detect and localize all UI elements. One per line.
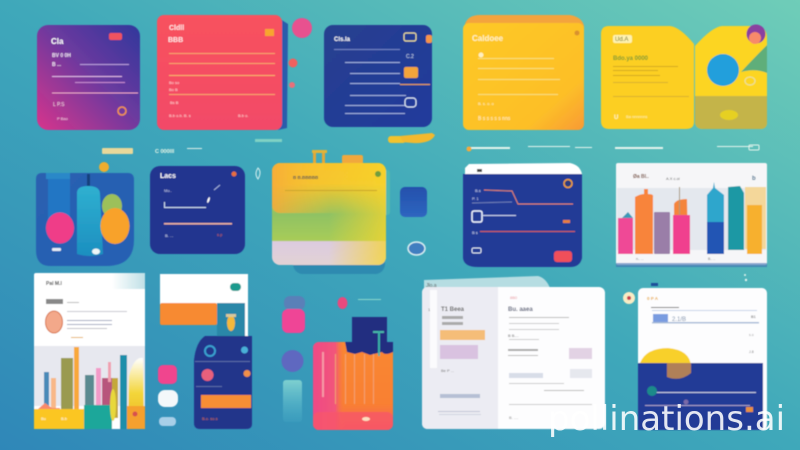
heading: navy list card: Cls.la	[334, 37, 351, 43]
panel: orange bag	[313, 317, 393, 430]
panel: red card: B.b o.	[238, 113, 248, 118]
panel: red card: Bo so	[169, 80, 180, 85]
panel: red card	[157, 15, 288, 130]
icon: red circle	[202, 369, 214, 381]
icon: small buttons column	[158, 365, 178, 426]
left column	[426, 283, 485, 415]
panel: white report with chart: Bu	[41, 416, 46, 421]
labels row between first and second row: C 000lll	[155, 149, 175, 155]
icon: orange tag	[404, 67, 418, 78]
panel: white bar chart: B.. ..	[708, 257, 715, 261]
panel: navy phone card	[194, 336, 252, 429]
panel: navy line card: Mo..	[164, 188, 172, 193]
icon: pill column	[282, 296, 381, 422]
panel: yellow folded card	[601, 26, 694, 129]
icon: orange ring	[564, 180, 572, 188]
panel: white and navy card	[638, 288, 767, 430]
button: teal pill	[230, 283, 241, 291]
panel: navy list card	[324, 25, 432, 127]
panel: purple card: BV 0 0H	[52, 53, 71, 59]
line chart	[484, 190, 573, 204]
panel: red card: Bo B	[169, 87, 178, 92]
icon: cream dot	[623, 292, 635, 304]
panel: yellow note card: B. s. o. o	[478, 101, 495, 106]
left column: 1	[428, 307, 431, 312]
panel: white and navy card: 0 P A	[647, 296, 659, 301]
panel: white and navy card: B1	[751, 314, 757, 319]
icon: peach ellipse	[46, 311, 62, 333]
heading: case: B B.BBBBB	[293, 175, 319, 180]
panel: purple card: L P.S	[53, 102, 65, 108]
footer: yellow	[34, 409, 84, 429]
labels row between first and second row	[102, 133, 759, 155]
panel: yellow note card: B s s s s s nns	[478, 116, 511, 122]
panel: red card: Bs B	[170, 100, 179, 105]
button: orange	[201, 395, 251, 408]
icon: tag top	[404, 33, 416, 41]
heading: navy line card: Lacs	[160, 173, 176, 180]
panel: white and navy card: s.o	[749, 333, 754, 337]
bars	[34, 347, 144, 429]
heading: yellow note card: Caldoee	[472, 34, 504, 43]
panel: white document	[422, 276, 605, 429]
panel: white report with chart: B.b	[61, 416, 68, 421]
heading: red card: Cldll	[169, 25, 184, 32]
icon: blue circle	[707, 54, 739, 86]
small sparkle marks	[256, 168, 747, 286]
panel: purple card: P Bao	[57, 116, 69, 121]
right column: 8B0	[510, 295, 518, 300]
yellow blob	[640, 348, 691, 380]
right column: B. ....	[509, 415, 518, 420]
panel: navy line card	[150, 166, 245, 254]
icon: blue rounded square	[400, 187, 427, 217]
panel: white report with chart	[34, 273, 145, 429]
panel: yellow gradient case	[272, 150, 390, 274]
icon: badge	[118, 107, 126, 115]
icon: dots beside red card	[288, 18, 312, 88]
panel: white and navy card: J.8	[749, 350, 754, 354]
panel: navy chart card with white header: P. 1	[472, 196, 479, 201]
heading: report: Pal M.l	[46, 281, 62, 287]
icon: pink ball	[46, 212, 74, 244]
icon: orange ball	[100, 208, 130, 244]
panel: blue bottles	[36, 162, 134, 266]
panel: navy line card: s.p	[217, 232, 223, 237]
icon: purple blob	[746, 24, 766, 44]
bars	[618, 182, 762, 254]
button: red	[554, 251, 572, 262]
heading: yellow folded card	[613, 35, 632, 43]
watermark: pollinations.ai	[548, 399, 785, 439]
panel: navy line card: B. ...	[165, 233, 173, 238]
icon: teal bottle	[77, 186, 103, 256]
panel: yellow folded card: U	[614, 115, 618, 121]
right column: B B....	[508, 333, 519, 338]
heading: purple card: Cla	[51, 37, 64, 46]
panel: navy list card: C.2	[406, 54, 414, 60]
panel: white and orange card	[160, 274, 248, 343]
right column	[508, 295, 592, 420]
panel: yellow shape card with blue circle	[695, 24, 767, 129]
panel: yellow note card	[463, 15, 584, 130]
panel: navy chart card with white header: B s	[472, 230, 478, 235]
icon: camera outline	[405, 98, 416, 107]
panel: white and navy card: 2.1/B	[672, 317, 686, 323]
right column: Bu. aaea	[508, 307, 533, 313]
left column: Jlo.a	[426, 283, 437, 289]
panel: white bar chart: b	[752, 176, 756, 182]
icon: small ring	[408, 242, 425, 255]
panel: white bar chart	[616, 163, 767, 267]
heading: bar chart: Øa Bl..	[633, 174, 649, 180]
panel: yellow folded card: Bdo.ya 0000	[613, 56, 649, 62]
slider lines	[655, 392, 756, 393]
panel: navy phone card: B.o. so.s	[202, 416, 218, 421]
panel: yellow folded card: Ba nnnnnns	[626, 114, 647, 119]
panel: purple card	[37, 25, 140, 130]
panel: purple card: B ...	[52, 62, 62, 68]
panel: white bar chart: n.. ...	[636, 257, 644, 261]
panel: red card: BBB	[168, 37, 183, 44]
left column: T1 Beea	[441, 307, 465, 313]
panel: navy chart card with white header	[463, 163, 582, 267]
left column: Be P ...	[441, 368, 454, 373]
panel: yellow folded card: Ud.A	[615, 37, 628, 43]
panel: white bar chart: A.X c.ol	[666, 176, 680, 181]
panel: navy chart card with white header: B.s	[475, 188, 481, 193]
panel: red card: B.b o.b. B. s	[169, 113, 191, 118]
